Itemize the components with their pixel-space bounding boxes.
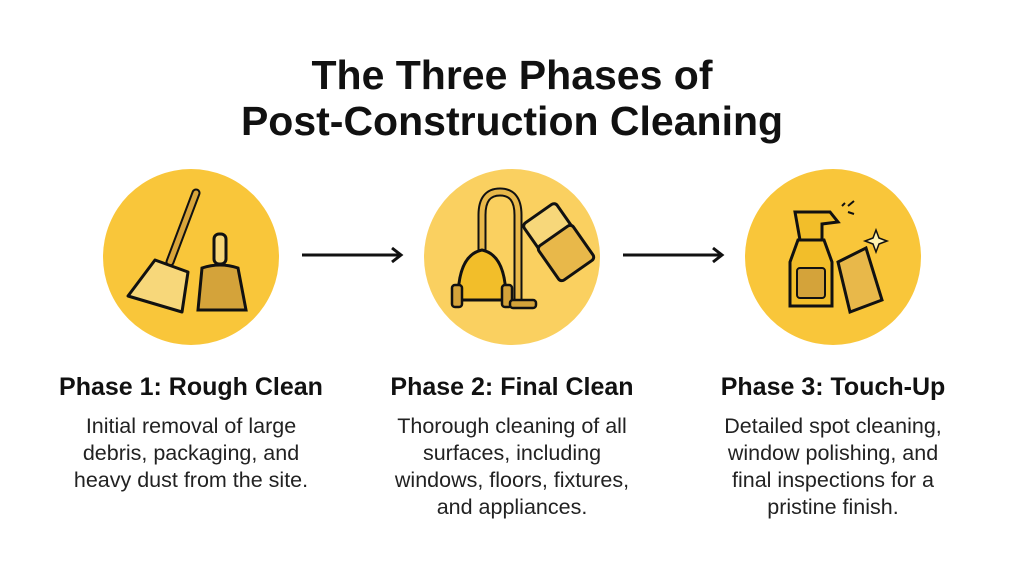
phase 1 text: Phase 1: Rough Clean (59, 373, 323, 401)
phase 2 text: surfaces, including (423, 441, 601, 465)
phase 1 text: heavy dust from the site. (74, 468, 308, 492)
phase 3 text: Detailed spot cleaning, (724, 414, 942, 438)
title: The Three Phases of (311, 52, 712, 98)
phase 3 text: pristine finish. (767, 495, 899, 519)
title (241, 52, 783, 144)
phase 1 text: Initial removal of large (86, 414, 296, 438)
phase 2 text: Thorough cleaning of all (397, 414, 627, 438)
phase 3 text (721, 373, 945, 519)
phase 2 text: Phase 2: Final Clean (390, 373, 634, 401)
phase 2 text: windows, floors, fixtures, (395, 468, 629, 492)
phase 3 text: Phase 3: Touch-Up (721, 373, 945, 401)
phase 1 text: debris, packaging, and (83, 441, 299, 465)
icon: vacuum and cloths (424, 169, 600, 345)
phase 2 text: and appliances. (437, 495, 587, 519)
phase 1 text (59, 373, 323, 492)
title: Post-Construction Cleaning (241, 98, 783, 144)
phase 3 text: window polishing, and (728, 441, 938, 465)
arrow 2 (623, 248, 722, 262)
phase 2 text (390, 373, 634, 519)
arrow 1 (302, 248, 401, 262)
icon: broom and dustpan (103, 169, 279, 345)
icon: spray bottle and cloth (745, 169, 921, 345)
phase 3 text: final inspections for a (732, 468, 934, 492)
